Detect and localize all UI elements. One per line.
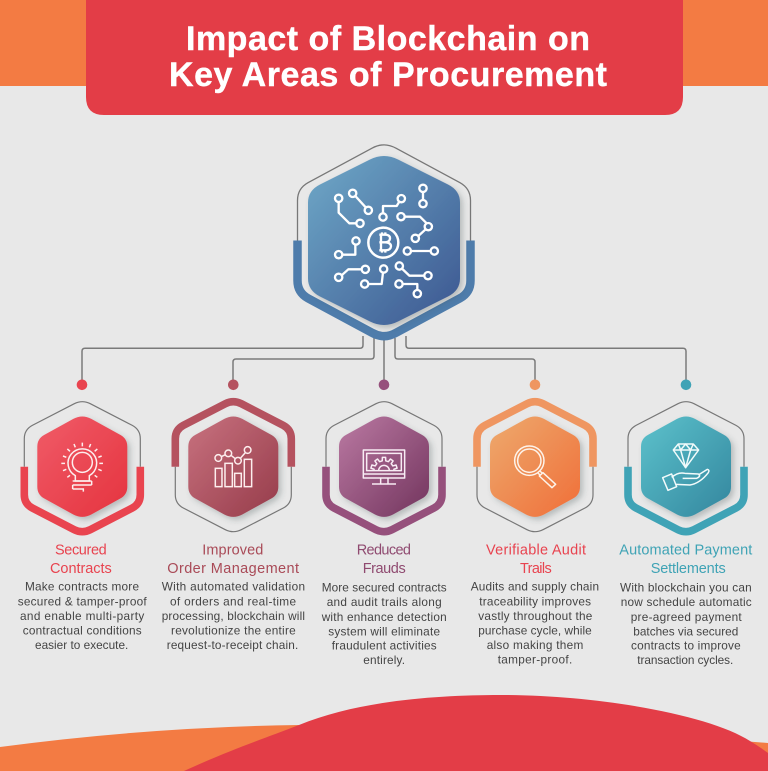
heading: Order Management	[167, 561, 299, 577]
description: fraudulent activities	[332, 639, 437, 653]
heading	[486, 543, 586, 577]
hexagon frame	[326, 402, 442, 532]
dot marker	[379, 380, 389, 390]
description: request-to-receipt chain.	[167, 638, 298, 652]
bottom wave: orange	[0, 725, 768, 771]
heading: Verifiable Audit	[486, 543, 586, 559]
description: system will eliminate	[328, 624, 440, 638]
hexagon frame	[477, 402, 593, 532]
header band	[0, 0, 768, 115]
description: revolutionize the entire	[171, 624, 296, 638]
description: secured & tamper-proof	[18, 594, 147, 608]
description	[321, 580, 447, 667]
heading: Contracts	[50, 561, 112, 577]
icon: light bulb	[61, 443, 103, 492]
description: also making them	[487, 638, 583, 652]
heading: Settlements	[651, 561, 726, 577]
description: traceability improves	[479, 594, 591, 608]
heading: Reduced	[357, 543, 411, 559]
heading	[619, 543, 752, 577]
description: now schedule automatic	[621, 595, 752, 609]
column 1: secured contracts	[18, 380, 147, 652]
heading	[167, 543, 299, 577]
column 4: verifiable audit trails	[471, 380, 599, 667]
title: Key Areas of Procurement	[169, 56, 607, 94]
description: batches via secured	[633, 624, 738, 638]
dot marker	[228, 380, 239, 390]
description: transaction cycles.	[637, 653, 733, 667]
description: tamper-proof.	[498, 653, 572, 667]
description: Make contracts more	[25, 580, 139, 594]
icon: diamond over hand	[663, 444, 709, 490]
connector lines	[82, 336, 686, 385]
description: of orders and real-time	[170, 594, 296, 608]
title: Impact of Blockchain on	[186, 20, 590, 58]
description: Audits and supply chain	[471, 580, 599, 594]
heading: Trails	[520, 561, 552, 577]
icon: bitcoin circuit	[335, 185, 438, 297]
dot marker	[681, 380, 691, 390]
icon: bar chart	[215, 447, 252, 487]
description: and enable multi-party	[20, 609, 144, 623]
heading	[50, 543, 112, 577]
description: More secured contracts	[322, 580, 447, 594]
description: contracts to improve	[631, 639, 741, 653]
bottom wave: red	[184, 695, 768, 771]
description: processing, blockchain will	[162, 609, 305, 623]
description	[471, 580, 599, 667]
hexagon frame	[628, 402, 744, 532]
description: With blockchain you can	[620, 580, 752, 594]
heading: Secured	[55, 543, 107, 559]
heading: Frauds	[363, 561, 406, 577]
column 5: automated payment settlements	[619, 380, 752, 667]
description: With automated validation	[162, 580, 305, 594]
description: easier to execute.	[35, 638, 128, 652]
dot marker	[530, 380, 540, 390]
heading: Automated Payment	[619, 543, 752, 559]
heading: Improved	[202, 543, 263, 559]
icon: monitor with gear	[363, 450, 405, 484]
description: purchase cycle, while	[478, 624, 592, 638]
description: entirely.	[363, 653, 405, 667]
description: with enhance detection	[321, 610, 447, 624]
hexagon frame	[175, 402, 291, 532]
heading	[357, 543, 411, 577]
column 3: reduced frauds	[321, 380, 447, 667]
description: vastly throughout the	[478, 609, 593, 623]
dot marker	[77, 380, 87, 390]
description	[162, 580, 305, 652]
central blockchain hexagon	[298, 145, 470, 336]
description	[620, 580, 752, 667]
title	[169, 20, 607, 94]
description: contractual conditions	[23, 624, 142, 638]
description	[18, 580, 147, 652]
description: pre-agreed payment	[631, 610, 742, 624]
icon: magnifying glass	[515, 446, 556, 488]
column 2: improved order management	[162, 380, 305, 652]
description: and audit trails along	[327, 595, 442, 609]
hexagon frame	[24, 402, 140, 532]
